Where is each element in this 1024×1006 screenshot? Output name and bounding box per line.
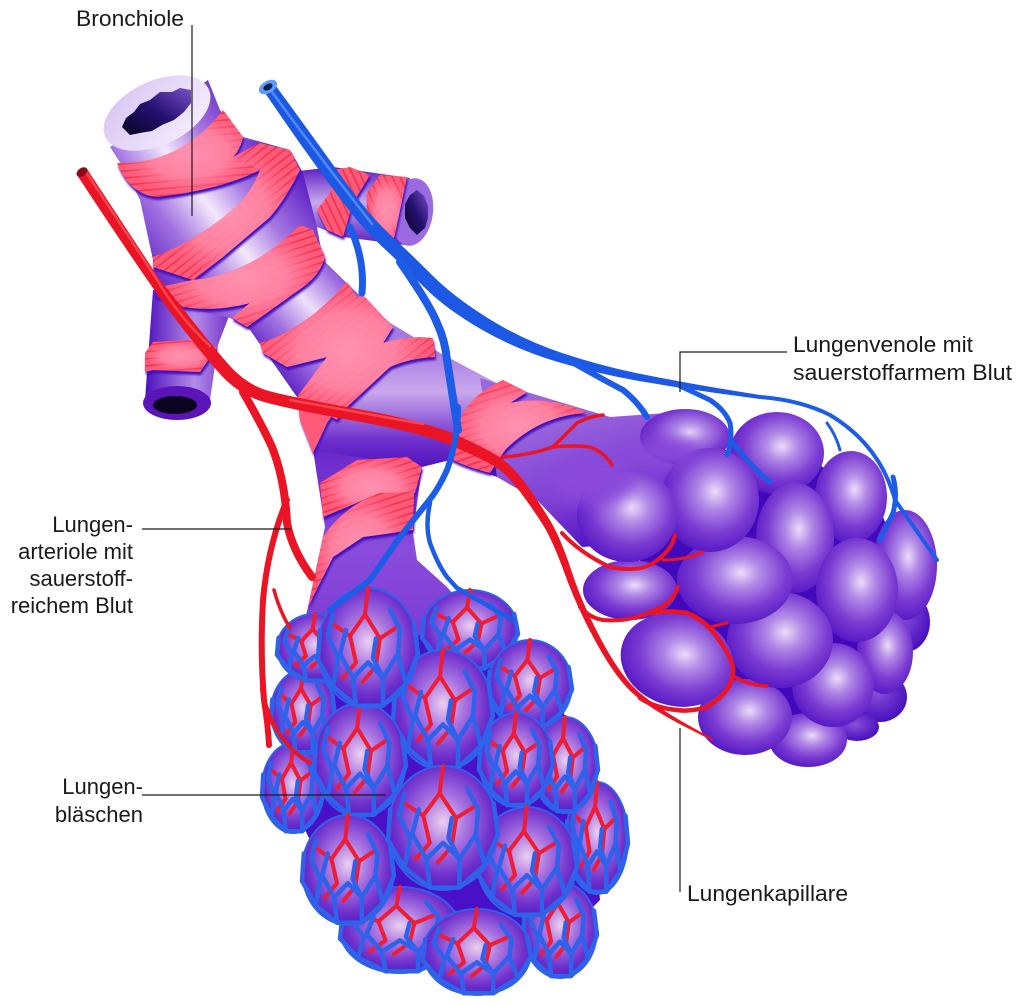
segment: middle tube (240, 262, 440, 450)
band: second diagonal (160, 225, 325, 327)
band: side tube left (317, 167, 370, 237)
band: lower left (145, 340, 217, 372)
label: Lungenarteriole (11, 512, 133, 618)
leader lines (142, 25, 787, 892)
branch: lower left tube (145, 290, 235, 400)
red highlights (86, 172, 423, 424)
label: Lungenarteriole: Lungen- (52, 512, 133, 537)
band: upper diagonal (153, 143, 300, 280)
alveoli back row (262, 590, 628, 995)
lower alveoli cluster (262, 588, 628, 995)
main venule (263, 82, 760, 399)
label: Lungenarteriole: arteriole mit (18, 539, 133, 564)
lower opening (143, 386, 211, 420)
alveoli front row (302, 588, 577, 925)
band: under artery (297, 397, 340, 453)
bronchiole tube (92, 60, 727, 650)
label: Lungenbläschen: bläschen (55, 802, 143, 827)
band: right (450, 380, 587, 473)
band: side tube right (367, 175, 407, 243)
label: Lungenbläschen: Lungen- (62, 774, 143, 799)
band: neck upper (320, 457, 422, 517)
right opening (386, 175, 438, 249)
label: Lungenvenole: sauerstoffarmem Blut (793, 360, 1012, 385)
main arteriole (77, 169, 713, 741)
top opening (92, 60, 222, 166)
segment: tube to right cluster (480, 378, 727, 547)
red arterioles (77, 169, 767, 763)
branch: upper right tube (290, 167, 410, 245)
icon: arteriole opening (75, 165, 89, 179)
blue highlight (272, 92, 372, 224)
blue venules (263, 82, 937, 620)
upper right alveoli cluster (550, 409, 937, 767)
label: Lungenbläschen (55, 774, 143, 827)
band: top ring (117, 110, 260, 197)
muscle bands (117, 110, 587, 607)
label: Lungenarteriole: reichem Blut (11, 593, 133, 618)
arteriole branches (243, 392, 767, 763)
band: third diagonal (260, 282, 435, 420)
label: Lungenvenole (793, 332, 1012, 385)
label: Lungenvenole: Lungenvenole mit (793, 332, 973, 357)
venule branches (330, 227, 937, 620)
icon: venule opening (256, 77, 280, 97)
label: Lungenkapillare: Lungenkapillare (687, 881, 848, 906)
segment: junction (300, 323, 520, 483)
label: Lungenarteriole: sauerstoff- (29, 566, 133, 591)
band: neck lower (308, 492, 414, 607)
segment: upper main tube (110, 80, 357, 330)
label: Bronchiole: Bronchiole (76, 6, 184, 31)
blend: tube into lobes (550, 438, 700, 504)
segment: neck to lower cluster (300, 450, 480, 650)
